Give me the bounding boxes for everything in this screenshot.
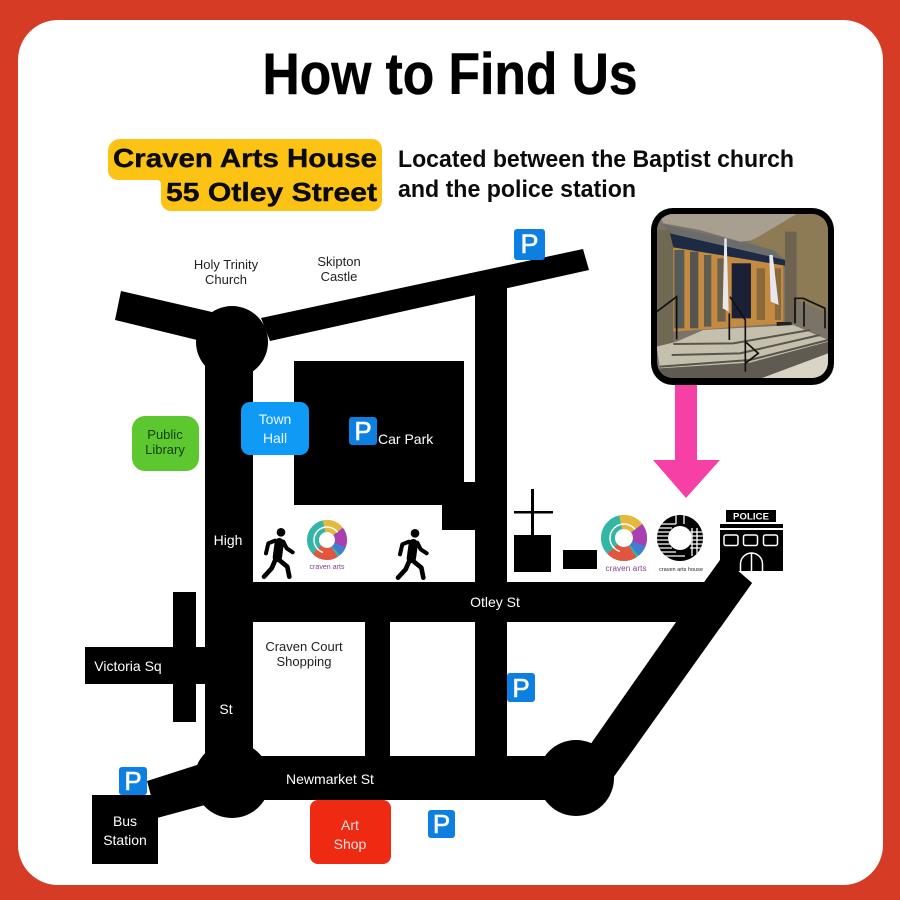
street map roads: [85, 249, 752, 864]
label: skipton castle: Skipton: [317, 254, 361, 269]
roundabout: south east: [538, 740, 614, 816]
logo: craven arts right: [606, 522, 646, 573]
road: victoria square: [85, 647, 205, 684]
logo: craven arts left: [310, 526, 345, 571]
road label: high: High: [214, 532, 242, 548]
label: bus station: Station: [103, 832, 147, 848]
parking icon: newmarket: [428, 809, 455, 839]
art shop box: [310, 800, 391, 864]
photo wooden frame: [673, 247, 783, 332]
town hall box: Town: [259, 411, 291, 427]
parking icon: east: [507, 673, 535, 703]
public library box: Public: [147, 427, 183, 442]
photo flags: [723, 238, 729, 312]
photo road: [657, 342, 828, 380]
photo glass panes: [674, 250, 684, 328]
road: east vertical: [475, 275, 507, 605]
parking icon: newmarket: P: [433, 809, 450, 839]
photo steps: [657, 325, 828, 368]
road: north west branch: [115, 291, 212, 340]
town hall box: [241, 402, 309, 455]
photo stone column: [785, 232, 797, 323]
public library box: [132, 416, 199, 471]
art shop box: Art: [341, 817, 359, 833]
icon: pedestrian left: [264, 528, 293, 577]
public library box: Library: [145, 442, 185, 457]
car park label: Car Park: [378, 431, 434, 447]
road: otley street: [253, 582, 715, 622]
photo lower roof: [662, 224, 785, 260]
photo: craven arts house entrance: [651, 208, 834, 385]
logo: craven arts right: craven arts: [606, 564, 646, 573]
location description: and the police station: [398, 176, 636, 203]
road label: st: St: [219, 701, 233, 717]
icon: police station: POLICE: [733, 512, 769, 522]
address highlight label: Craven Arts House: [113, 143, 377, 173]
location description: [398, 146, 794, 203]
parking icon: top road: [514, 229, 545, 260]
art shop box: Shop: [334, 836, 367, 852]
photo pavement: [762, 353, 828, 378]
photo canopy: [670, 233, 785, 266]
logo: craven arts house: craven arts house: [659, 567, 703, 573]
icon: pedestrian right: [398, 529, 427, 578]
roundabout: north: [196, 306, 268, 378]
road label: victoria sq: Victoria Sq: [94, 658, 162, 674]
road: link between otley and newmarket: [365, 620, 390, 758]
road: east link between otley and newmarket: [475, 620, 507, 758]
road: high street: [205, 340, 253, 790]
road: bus station link: [147, 765, 205, 818]
road: north east road: [261, 249, 589, 341]
church icon: [514, 489, 553, 572]
road label: otley st: Otley St: [470, 594, 520, 610]
photo flag bases: [713, 330, 730, 337]
road: newmarket street: [205, 756, 585, 800]
parking icon: bus station: P: [124, 766, 142, 796]
road label: newmarket st: Newmarket St: [286, 771, 374, 787]
label: skipton castle: Castle: [321, 269, 357, 284]
parking icon: car park: P: [354, 416, 372, 446]
road: victoria square cross street: [173, 592, 196, 722]
icon: police station: [720, 510, 783, 571]
parking icon: bus station: [119, 766, 147, 796]
road: diagonal to police station: [570, 560, 752, 785]
label: holy trinity church: Holy Trinity: [194, 257, 259, 272]
arrow: pink pointing down to venue: [653, 382, 720, 498]
title: How to Find Us: [262, 42, 638, 107]
town hall box: Hall: [263, 430, 287, 446]
label: craven court shopping: Shopping: [277, 654, 331, 669]
parking icon: car park: [349, 416, 377, 446]
photo gravel roof: [658, 214, 797, 242]
roundabout: south west: [194, 742, 270, 818]
car park block: [294, 361, 475, 530]
small building: [563, 550, 597, 569]
bus station block: [92, 795, 158, 864]
logo: craven arts house: [657, 515, 703, 571]
photo stone wall right: [750, 214, 828, 313]
road overlap at police station: [695, 560, 752, 628]
parking icon: top road: P: [520, 229, 539, 259]
label: holy trinity church: Church: [205, 272, 247, 287]
photo left stone wall: [657, 230, 673, 345]
logo: craven arts left: craven arts: [310, 564, 345, 571]
label: craven court shopping: Craven Court: [265, 639, 343, 654]
address highlight label: 55 Otley Street: [166, 177, 377, 207]
photo railings: [657, 297, 825, 372]
label: bus station: Bus: [113, 813, 137, 829]
parking icon: east: P: [512, 673, 530, 703]
location description: Located between the Baptist church: [398, 146, 794, 173]
address highlight label: [108, 139, 382, 211]
